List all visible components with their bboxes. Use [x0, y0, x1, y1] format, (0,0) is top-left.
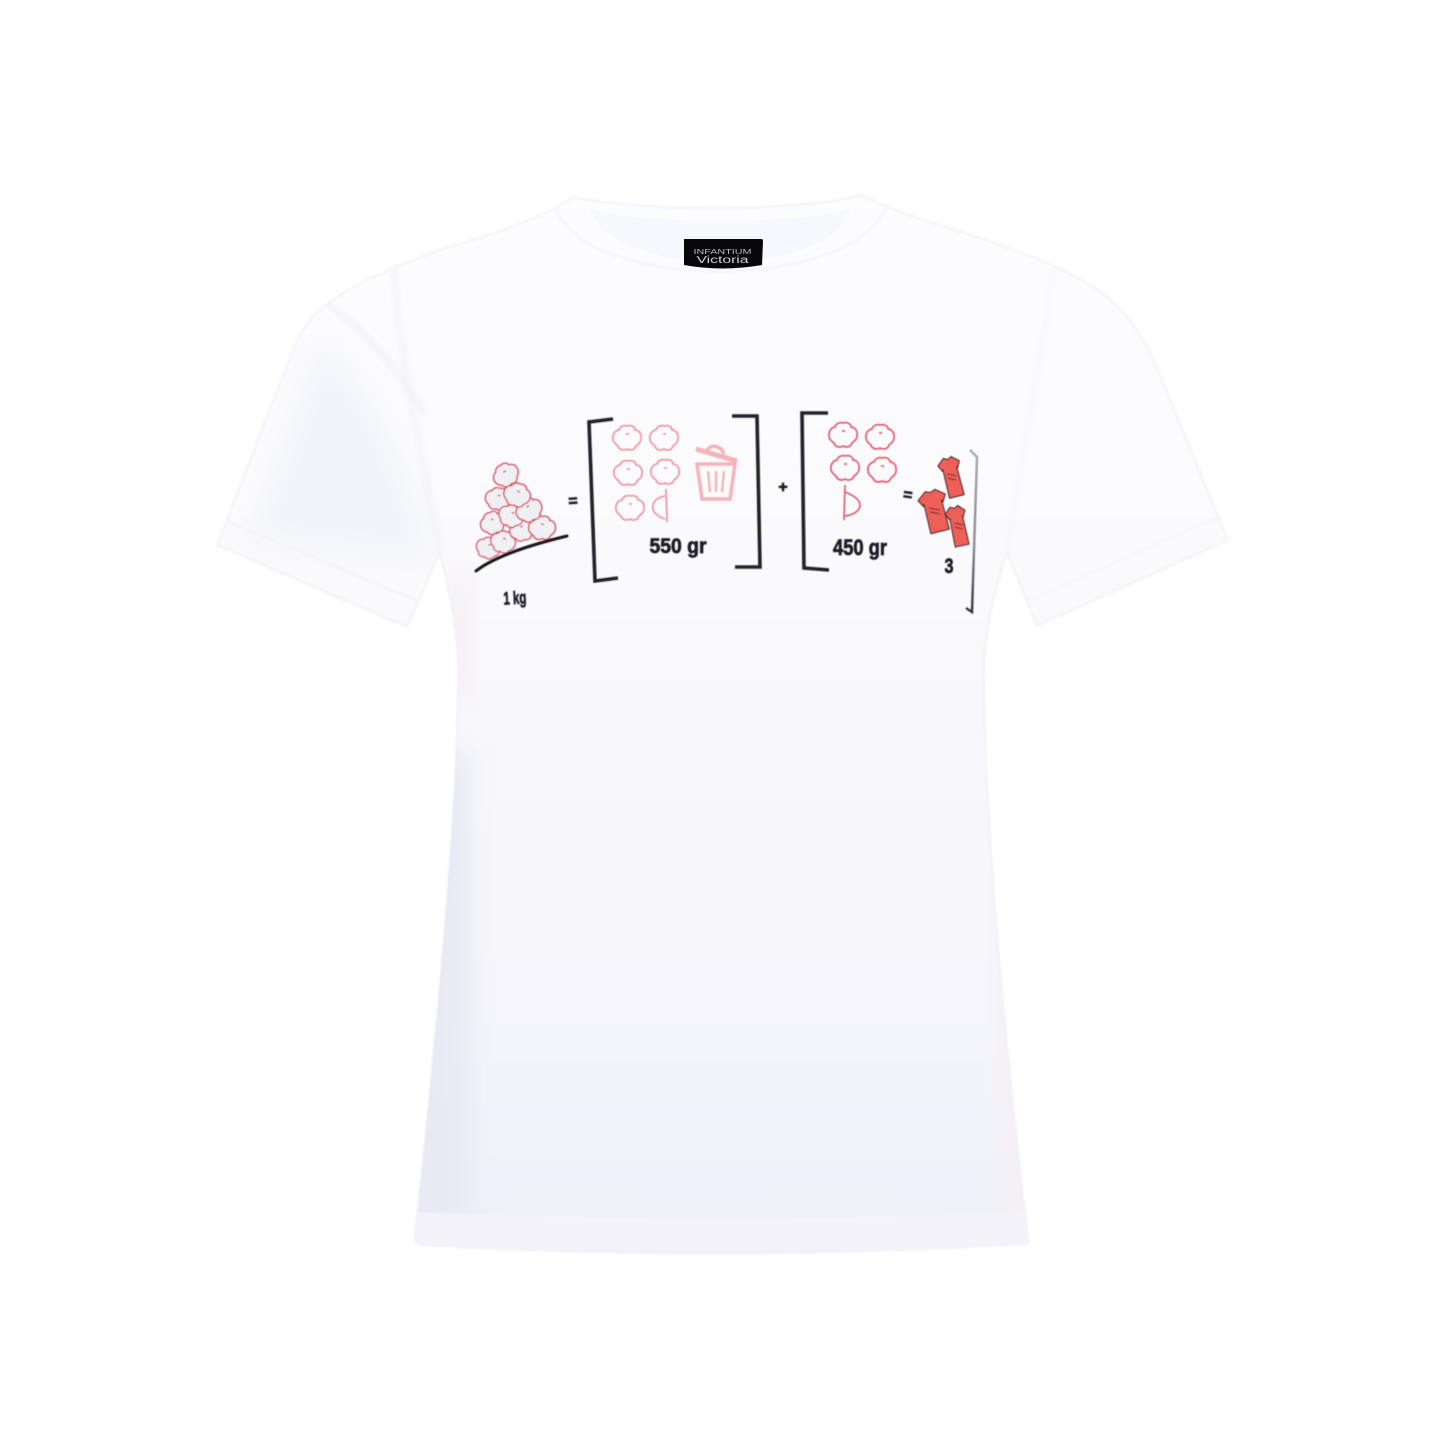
- left bracket: used cotton: [802, 413, 829, 570]
- equals sign: =: [902, 486, 914, 505]
- neck label: Victoria: [696, 255, 749, 266]
- icon: trash can: [696, 446, 737, 499]
- used cotton bolls: [829, 423, 896, 520]
- cotton pile with ground line, 1 kg: 1 kg: [503, 587, 527, 609]
- right bracket of discarded cotton: [732, 416, 760, 567]
- t-shirt garment: [217, 195, 1228, 1253]
- partial quantity label: 3: [944, 555, 954, 578]
- neck label: [684, 239, 763, 268]
- cotton pile with ground line, 1 kg: [473, 459, 567, 609]
- product photo: white t-shirt with printed cotton equation: [217, 195, 1228, 1254]
- discarded cotton bolls, 550 gr: [613, 426, 679, 522]
- plus sign: +: [778, 479, 788, 496]
- right bracket fading over sleeve fold: [966, 450, 977, 612]
- left bracket: discarded cotton: [589, 419, 618, 581]
- neck label: INFANTIUM: [694, 247, 752, 256]
- printed equation: [473, 413, 977, 612]
- 450 gr label: 450 gr: [833, 535, 887, 560]
- red t-shirts: [916, 455, 972, 548]
- 550 gr label: 550 gr: [650, 535, 706, 558]
- equals sign: =: [568, 493, 578, 510]
